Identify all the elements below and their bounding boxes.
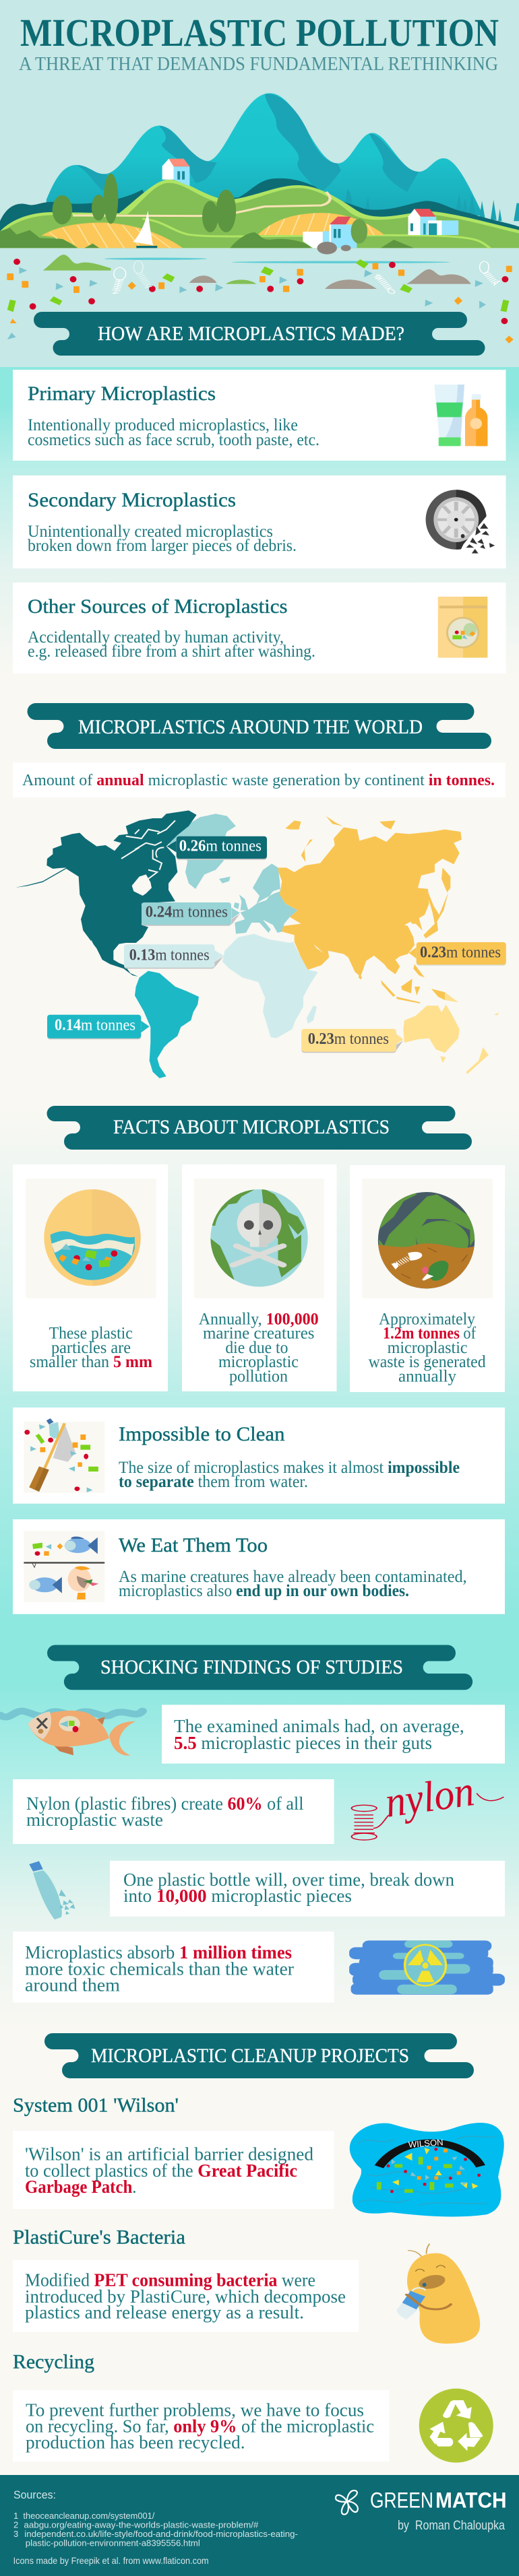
card: 1.2m tonnes: microplastic	[388, 1339, 468, 1357]
banner: how are microplastics made: HOW ARE MICROPLASTICS MADE?	[98, 323, 404, 345]
card: nylon 60%: microplastic waste	[26, 1810, 163, 1830]
section 1: how are microplastics made	[7, 312, 514, 673]
logo: greenmatch flower	[336, 2490, 358, 2515]
card: 5.5 pieces: The examined animals had, on average,	[174, 1716, 464, 1736]
label pointers: asia and australia	[396, 948, 417, 1051]
card: primary microplastics: cosmetics such as face scrub, tooth paste, etc.	[28, 431, 319, 449]
card: wilson	[13, 2131, 334, 2209]
banner: shocking findings: SHOCKING FINDINGS OF STUDIES	[100, 1656, 403, 1678]
card: 1.2m tonnes: 1.2m tonnes of	[383, 1325, 477, 1343]
card: primary microplastics: Intentionally produced microplastics, like	[28, 416, 298, 434]
card: we eat them too: As marine creatures have already been contaminated,	[119, 1568, 467, 1586]
icon: recycling symbol	[419, 2389, 493, 2463]
card: 100,000 marine creatures: pollution	[229, 1367, 288, 1385]
sources list: Icons made by Freepik et al. from www.flaticon.com	[13, 2555, 209, 2566]
fields	[41, 213, 385, 248]
sky	[0, 0, 519, 367]
card: recycling: To prevent further problems, we have to focus	[26, 2400, 364, 2420]
road	[73, 192, 330, 216]
card: impossible to clean: Impossible to Clean	[119, 1423, 284, 1445]
card: plasticure	[13, 2260, 359, 2332]
heading: system 001 wilson: System 001 'Wilson'	[13, 2094, 179, 2117]
icon: nylon thread spool	[352, 1766, 503, 1840]
card: plasticure: plastics and release energy as a result.	[25, 2303, 304, 2323]
card: we eat them too	[13, 1519, 505, 1614]
label: asia: 0.23m tonnes	[420, 944, 501, 962]
header landscape illustration	[0, 93, 519, 324]
label: europe: 0.24m tonnes	[146, 904, 228, 921]
card: we eat them too: microplastics also end up in our own bodies.	[119, 1582, 409, 1600]
icon: washing machine	[438, 597, 487, 658]
card: recycling	[13, 2390, 390, 2462]
icon: cosmetics tube and bottle	[434, 385, 487, 446]
card: 1 million times: more toxic chemicals than the water	[25, 1958, 294, 1979]
card: wilson: to collect plastics of the Great Pacific	[25, 2160, 297, 2181]
icon: wilson barrier in the garbage patch: WILSON	[408, 2137, 444, 2150]
banner: shocking findings	[47, 1645, 472, 1690]
banner: how are microplastics made	[34, 312, 485, 356]
icon: nylon thread spool: nylon	[382, 1766, 477, 1826]
icon: fishing net with debris	[24, 1418, 104, 1493]
sources list	[13, 2488, 298, 2566]
continent: north america	[16, 810, 197, 977]
section 5: cleanup projects	[13, 2033, 504, 2463]
pine trees	[344, 189, 519, 221]
card: secondary microplastics: broken down from larger pieces of debris.	[28, 537, 297, 555]
icon: toxic water with radiation sign	[349, 1940, 505, 1995]
card: primary microplastics: Primary Microplastics	[28, 383, 216, 405]
logo: greenmatch wordmark: GREEN	[370, 2488, 433, 2512]
banner: around the world	[27, 703, 491, 749]
card: 10,000 pieces: into 10,000 microplastic pieces	[123, 1886, 352, 1906]
bushes	[0, 228, 414, 248]
banner: cleanup projects	[44, 2033, 474, 2078]
card: impossible to clean: The size of microplastics makes it almost impossible	[119, 1459, 460, 1477]
section 4: shocking findings	[0, 1645, 505, 2003]
mountains	[47, 93, 483, 216]
card: smaller than 5 mm: smaller than 5 mm	[30, 1353, 152, 1371]
continent: greenland	[169, 814, 236, 889]
card: impossible to clean	[13, 1408, 505, 1504]
card: other sources: Accidentally created by human activity,	[28, 628, 284, 647]
green hills	[0, 180, 519, 248]
card: primary microplastics	[13, 370, 506, 461]
sources list: 3	[13, 2529, 18, 2539]
card: impossible to clean: to separate them from water.	[119, 1473, 308, 1491]
card: 1 million times: Microplastics absorb 1 million times	[25, 1942, 292, 1962]
map: eurasia, africa and oceania	[222, 816, 499, 1074]
card: nylon 60%	[13, 1779, 334, 1844]
map intro strip	[13, 762, 506, 797]
icon: egg-shaped water sample	[26, 1179, 156, 1298]
dark hills	[0, 178, 519, 247]
icon: fish and person eating	[24, 1531, 104, 1602]
card: 1 million times: around them	[25, 1975, 120, 1995]
trees	[53, 174, 236, 232]
card: 100,000 marine creatures: marine creatures	[203, 1325, 314, 1343]
sources list: Sources:	[13, 2488, 56, 2501]
card: plasticure: Modified PET consuming bacteria were	[25, 2270, 315, 2290]
card: 5.5 pieces	[162, 1705, 505, 1764]
label: north america: 0.26m tonnes	[179, 837, 262, 855]
card: nylon 60%: Nylon (plastic fibres) create 60% of all	[26, 1793, 303, 1814]
label: australia	[301, 1029, 396, 1053]
card: wilson: 'Wilson' is an artificial barrier designed	[25, 2144, 314, 2165]
card: 100,000 marine creatures: die due to	[225, 1339, 288, 1357]
footer	[0, 2475, 519, 2576]
house right	[408, 209, 458, 235]
card: wilson: Garbage Patch.	[25, 2177, 136, 2197]
section 3: facts about microplastics	[13, 1106, 505, 1614]
icon: dead fish with plastic	[0, 1711, 142, 1756]
card: 10,000 pieces	[110, 1861, 505, 1917]
card: 1.2m tonnes: Approximately	[379, 1311, 475, 1329]
continent: asia	[278, 816, 462, 1003]
card: smaller than 5 mm	[13, 1164, 168, 1391]
sailboat	[133, 211, 157, 248]
card: 100,000 marine creatures: microplastic	[218, 1353, 299, 1371]
sources list: 2	[13, 2519, 18, 2530]
map: the americas	[16, 810, 240, 1078]
banner: cleanup projects: MICROPLASTIC CLEANUP PROJECTS	[91, 2045, 409, 2067]
sources list: theoceancleanup.com/system001/	[23, 2511, 155, 2521]
continent: south america	[135, 971, 199, 1078]
card: recycling: production has been recycled.	[26, 2433, 245, 2453]
card: smaller than 5 mm: These plastic	[49, 1325, 133, 1343]
world map	[16, 810, 499, 1078]
label: africa: 0.13m tonnes	[129, 947, 210, 964]
fish skeletons	[113, 261, 500, 294]
section 2: microplastics around the world	[13, 703, 506, 1078]
sources list: aabgu.org/eating-away-the-worlds-plastic-waste-problem/#	[24, 2519, 259, 2530]
label: africa	[124, 944, 214, 968]
card: secondary microplastics: Unintentionally created microplastics	[28, 523, 273, 541]
islands and rocks	[43, 255, 471, 289]
card: secondary microplastics: Secondary Microplastics	[28, 489, 236, 511]
icon: earth with polluted soil	[362, 1179, 493, 1298]
heading: plasticure's bacteria: PlastiCure's Bacteria	[13, 2226, 185, 2249]
continent: europe	[234, 863, 298, 934]
map intro strip: Amount of annual microplastic waste generation by continent in tonnes.	[22, 772, 495, 789]
card: 100,000 marine creatures: Annually, 100,000	[199, 1311, 319, 1329]
card: 1.2m tonnes	[350, 1165, 505, 1392]
card: other sources	[13, 583, 506, 673]
card: plasticure: introduced by PlastiCure, which decompose	[25, 2286, 346, 2307]
continent: africa	[222, 934, 318, 1038]
heading: recycling: Recycling	[13, 2351, 94, 2373]
card: 1.2m tonnes: annually	[398, 1367, 456, 1385]
card: 100,000 marine creatures	[182, 1164, 337, 1391]
card: smaller than 5 mm: particles are	[51, 1339, 131, 1357]
logo: greenmatch wordmark	[370, 2488, 507, 2512]
card: we eat them too: We Eat Them Too	[119, 1534, 268, 1556]
icon: wilson barrier in the garbage patch	[350, 2123, 504, 2217]
label: australia: 0.23m tonnes	[308, 1030, 389, 1048]
banner: around the world: MICROPLASTICS AROUND THE WORLD	[78, 716, 423, 738]
card: secondary microplastics	[13, 475, 506, 568]
label: south america	[47, 1015, 141, 1039]
floating plastic debris	[7, 259, 512, 324]
house centre	[303, 217, 357, 255]
house on hill	[162, 159, 189, 187]
card: 5.5 pieces: 5.5 microplastic pieces in their guts	[174, 1733, 432, 1753]
label pointers: americas	[141, 840, 240, 1032]
sources list: independent.co.uk/life-style/food-and-drink/food-microplastics-eating-	[24, 2529, 298, 2539]
icon: polluted globe with skull	[194, 1179, 324, 1298]
caspian and gulf waters	[313, 921, 413, 953]
label: south america: 0.14m tonnes	[55, 1016, 135, 1034]
icon: worn tyre	[426, 490, 500, 557]
water ripples	[104, 258, 450, 263]
logo: greenmatch wordmark: MATCH	[435, 2488, 507, 2512]
card: 10,000 pieces: One plastic bottle will, over time, break down	[123, 1870, 454, 1890]
icon: breaking plastic bottle	[29, 1861, 75, 1919]
continent: australia	[403, 992, 499, 1074]
sources list: 1	[13, 2511, 18, 2521]
card: other sources: e.g. released fibre from a shirt after washing.	[28, 642, 315, 661]
icon: bacterium eating bottle	[396, 2244, 480, 2344]
card: recycling: on recycling. So far, only 9% of the microplastic	[26, 2416, 374, 2437]
sources list: plastic-pollution-environment-a8395556.html	[26, 2538, 200, 2548]
banner: facts: FACTS ABOUT MICROPLASTICS	[113, 1116, 390, 1138]
tree in front of house	[351, 219, 367, 244]
card: 1 million times	[13, 1931, 334, 2003]
debris around banner	[7, 333, 514, 343]
card: other sources: Other Sources of Microplastics	[28, 595, 287, 618]
card: 1.2m tonnes: waste is generated	[369, 1353, 486, 1371]
banner: facts	[47, 1106, 472, 1150]
